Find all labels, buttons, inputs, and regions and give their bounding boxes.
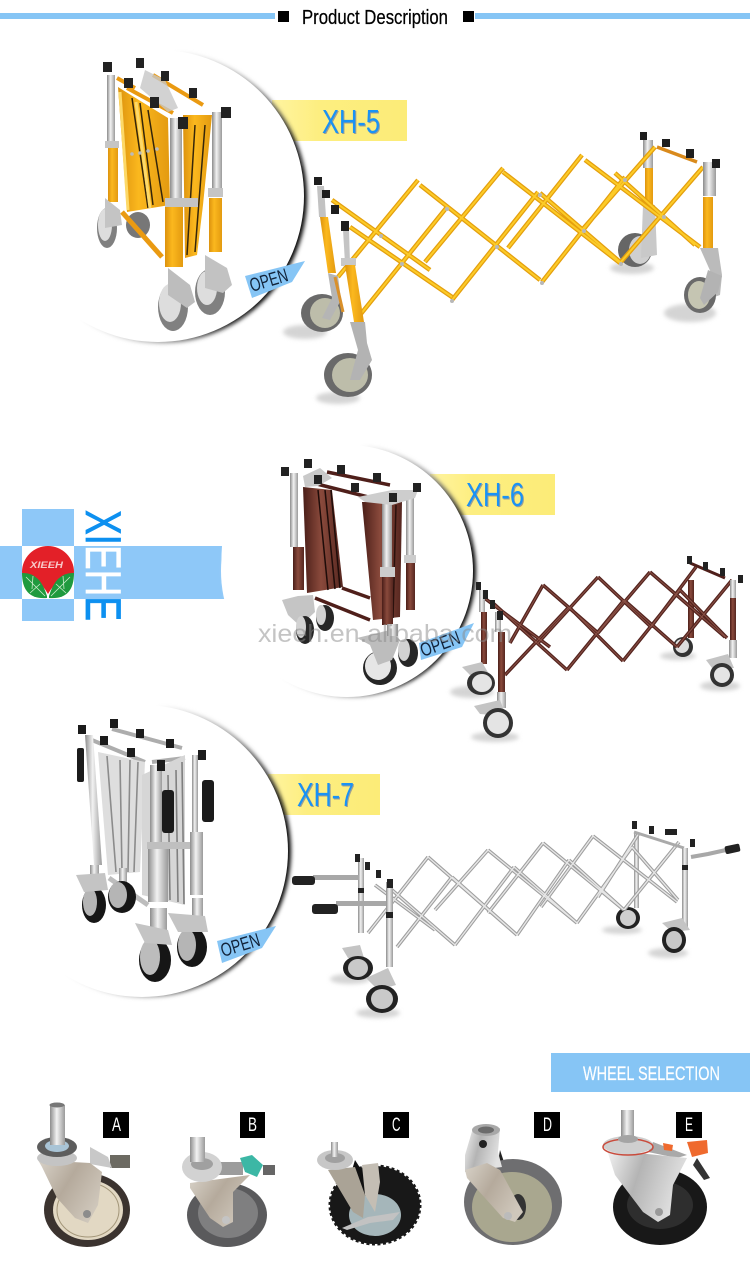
label A: A [112,1115,121,1136]
panel: wheel selection [37,1053,750,1247]
wheel D [464,1112,562,1245]
header: Product Description: Product Description [302,7,448,29]
XH-6 expanded cart [450,556,743,742]
panel: XH-5 model [12,50,722,404]
right posts [687,556,743,687]
XIEHE vertical wordmark [86,510,121,620]
XH-7 yellow label [268,774,380,815]
left posts [462,582,513,738]
XIEHE vertical wordmark: XIEHE [75,510,131,621]
wheel E [603,1110,710,1245]
left posts [301,177,372,397]
XH-6 circle inset with folded cart [221,445,476,697]
label A [103,1112,129,1138]
label C: C [392,1115,400,1136]
XH-5 OPEN tag: OPEN [247,265,291,297]
XH-7 expanded cart [292,821,741,1018]
header: Product Description [0,7,750,29]
wheel A [37,1102,130,1247]
XIEHE vertical wordmark: XIEHE [75,510,131,621]
right posts and handle [632,821,741,953]
watermark: xieeh.en.alibaba.com [258,620,512,648]
XH-7 yellow label: XH-7 [297,776,354,813]
XH-6 yellow label: XH-6 [466,476,524,513]
logo mark: red circle and green leaves: XIEEH [29,560,64,570]
XH-6 yellow label [430,474,555,515]
wheel selection heading [551,1053,750,1092]
left posts and handles [292,854,398,1013]
right posts [640,132,722,313]
XH-5 expanded cart [283,132,722,404]
wheel B [182,1112,275,1247]
XH-5 circle inset with folded cart [12,50,307,343]
label B: B [248,1115,257,1136]
XH-5 yellow label [272,100,407,141]
XH-7 circle inset with folded cart [0,705,291,997]
panel: XIEHE logo [0,509,225,621]
panel: XH-6 model [221,445,743,742]
label D: D [543,1115,552,1136]
logo mark: red circle and green leaves [22,546,74,598]
XH-5 yellow label: XH-5 [322,103,380,140]
XH-7 OPEN tag: OPEN [218,930,263,962]
label E: E [685,1115,693,1136]
panel: XH-7 model [0,705,741,1018]
XH-6 OPEN tag: OPEN [418,628,463,662]
wheel C [317,1112,420,1244]
